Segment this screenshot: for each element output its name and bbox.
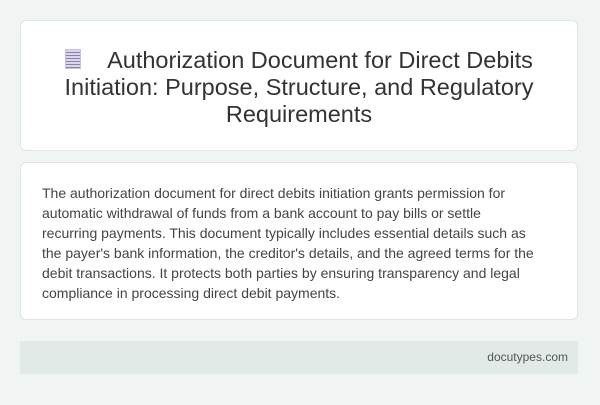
title: Authorization Document for Direct Debits Initiation: Purpose, Structure, and Regulatory Requirements (65, 47, 533, 127)
footer text: docutypes.com (487, 350, 568, 364)
panel: title card (20, 20, 578, 151)
footer bar (20, 341, 578, 374)
text block: The authorization document for direct debits initiation grants permission for automatic withdrawal of funds from a bank account to pay bills or settle recurring payments. This document typically includes essential details such as the payer's bank information, the creditor's details, and the agreed terms for the debit transactions. It protects both parties by ensuring transparency and legal compliance in processing direct debit payments. (42, 185, 534, 301)
icon: document (65, 49, 81, 69)
panel: description card (20, 162, 578, 320)
